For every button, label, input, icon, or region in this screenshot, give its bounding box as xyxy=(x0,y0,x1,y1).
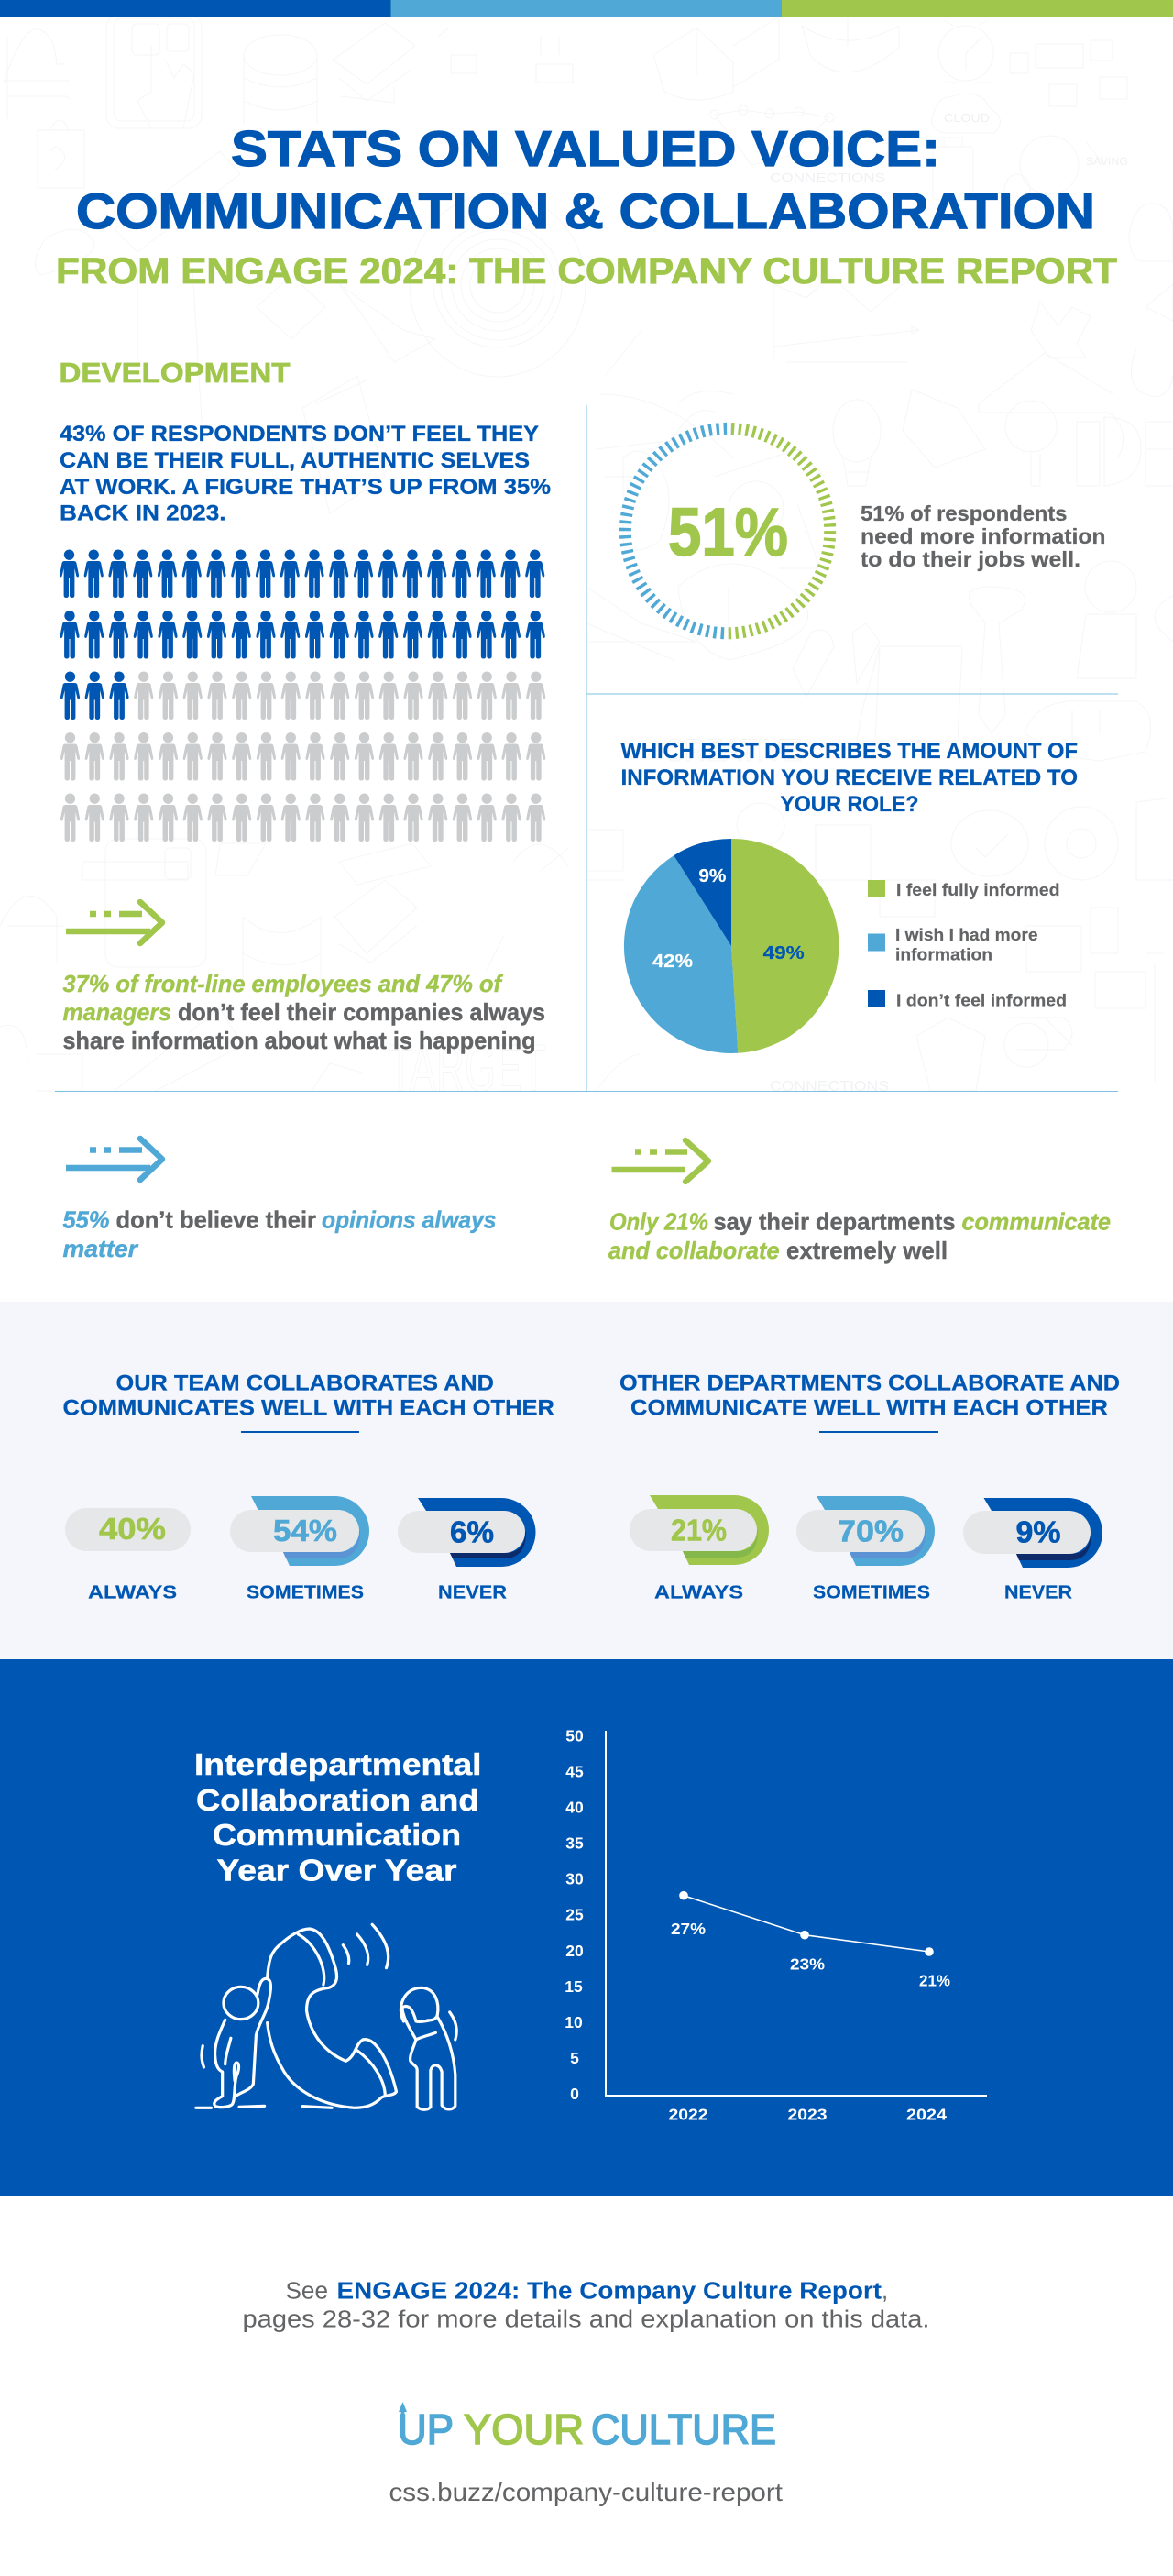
title: STATS ON VALUED VOICE: xyxy=(231,120,940,177)
stat: never 9%: 9% xyxy=(1015,1515,1061,1549)
text: 37% of front-line employees: don’t feel their companies always xyxy=(178,998,545,1026)
panel: information pie chart xyxy=(621,739,1078,1053)
heading: other departments: OTHER DEPARTMENTS COLLABORATE AND xyxy=(619,1371,1120,1395)
question heading: YOUR ROLE? xyxy=(781,792,918,817)
pictogram: 43 of 100 people xyxy=(60,550,545,842)
text: only 21%: communicate xyxy=(962,1208,1111,1236)
heading: other departments xyxy=(619,1371,1120,1433)
icon: blue arrow xyxy=(66,1139,162,1180)
heading: our team: COMMUNICATES WELL WITH EACH OTHER xyxy=(62,1395,554,1421)
text: 37% of front-line employees: managers xyxy=(62,998,171,1026)
line chart: 2023 xyxy=(788,2106,828,2124)
text: 43% of respondents: AT WORK. A FIGURE THAT’S UP FROM 35% xyxy=(60,475,551,500)
line chart: 25 xyxy=(565,1906,584,1924)
line chart xyxy=(565,1726,987,2124)
stat: never 6%: 6% xyxy=(450,1515,494,1549)
text: 43% of respondents: 43% OF RESPONDENTS DON’T FEEL THEY xyxy=(60,422,539,446)
stat: sometimes 70% xyxy=(796,1496,935,1602)
line chart: 0 xyxy=(570,2085,579,2103)
text: 55% opinions: matter xyxy=(62,1235,139,1262)
footer note: pages 28-32 for more details and explanation on this data. xyxy=(242,2306,929,2332)
stat: sometimes 70%: SOMETIMES xyxy=(813,1582,930,1602)
title xyxy=(76,120,1095,239)
heading: Communication xyxy=(213,1818,461,1852)
icon: green arrow xyxy=(66,902,162,943)
line chart: 2024 xyxy=(906,2106,947,2124)
stat: never 9%: NEVER xyxy=(1004,1582,1072,1602)
heading: Collaboration and xyxy=(196,1783,478,1817)
51% description: to do their jobs well. xyxy=(861,547,1080,571)
stat: never 6%: NEVER xyxy=(438,1582,507,1602)
pie chart: 9% xyxy=(698,865,726,886)
text: CREATIVE xyxy=(664,733,802,768)
text: only 21%: Only 21% xyxy=(609,1208,708,1236)
stat: always 40%: ALWAYS xyxy=(88,1582,177,1602)
text: 43% of respondents: CAN BE THEIR FULL, AUTHENTIC SELVES xyxy=(60,448,530,473)
line chart: 27% xyxy=(671,1920,706,1938)
title: COMMUNICATION & COLLABORATION xyxy=(76,182,1095,239)
heading xyxy=(194,1747,482,1888)
subtitle: FROM ENGAGE 2024: THE COMPANY CULTURE REPORT xyxy=(56,251,1117,292)
footer note: See xyxy=(286,2279,328,2305)
text: CONNECTIONS xyxy=(770,1079,889,1095)
logo: up your culture xyxy=(398,2402,776,2453)
line chart: 23% xyxy=(790,1955,825,1974)
heading: other departments: COMMUNICATE WELL WITH EACH OTHER xyxy=(630,1395,1108,1421)
51% description: need more information xyxy=(861,524,1105,548)
stat: always 40%: 40% xyxy=(99,1512,166,1546)
section heading: development: DEVELOPMENT xyxy=(59,358,291,389)
text: 37% of front-line employees: share information about what is happening xyxy=(62,1027,535,1054)
line chart: 40 xyxy=(565,1799,584,1817)
51% description xyxy=(861,501,1105,571)
logo: up your culture: YOUR xyxy=(464,2405,584,2453)
text: 43% of respondents xyxy=(60,422,551,526)
text: 55% opinions: 55% xyxy=(62,1206,110,1234)
stat: sometimes 70%: 70% xyxy=(838,1514,904,1548)
text: TARGET xyxy=(389,1032,546,1106)
pie chart: 49% xyxy=(763,942,805,963)
text: 37% of front-line employees: 37% of front-line employees and 47% of xyxy=(62,970,503,997)
stat: sometimes 54% xyxy=(230,1496,369,1602)
panel dividers xyxy=(55,405,1118,1091)
stat: always 40% xyxy=(65,1508,191,1602)
panel: year over year xyxy=(0,1659,1173,2196)
line chart: 50 xyxy=(565,1726,584,1745)
line chart: 21% xyxy=(919,1972,950,1990)
text: SAVING xyxy=(1086,155,1128,168)
text: 55% opinions xyxy=(62,1206,497,1262)
pie legend: I don’t feel informed xyxy=(896,992,1067,1010)
pie legend xyxy=(868,880,1067,1010)
footer note: , xyxy=(882,2279,888,2305)
text: only 21% xyxy=(608,1208,1111,1264)
footer url: css.buzz/company-culture-report xyxy=(389,2478,783,2506)
line chart: 35 xyxy=(565,1833,584,1852)
panel: collaboration pills xyxy=(0,1302,1173,1659)
stat: always 21%: ALWAYS xyxy=(654,1582,743,1602)
stat: sometimes 54%: 54% xyxy=(273,1514,337,1547)
question heading: WHICH BEST DESCRIBES THE AMOUNT OF xyxy=(621,739,1078,764)
logo: up your culture: CULTURE xyxy=(591,2405,776,2453)
line chart: 45 xyxy=(565,1762,584,1780)
footer note: ENGAGE 2024: The Company Culture Report xyxy=(337,2279,882,2305)
stat: always 21% xyxy=(630,1495,769,1602)
pie chart xyxy=(624,839,839,1053)
line chart: 15 xyxy=(565,1977,583,1996)
pie legend: information xyxy=(895,946,992,964)
text: 37% of front-line employees xyxy=(62,970,545,1054)
51% value: 51% xyxy=(668,494,788,570)
heading: Year Over Year xyxy=(216,1854,457,1888)
icon: green arrow xyxy=(612,1140,708,1182)
heading: our team xyxy=(62,1371,554,1433)
line chart: 2022 xyxy=(669,2106,708,2124)
line chart: 30 xyxy=(565,1870,584,1888)
text: 55% opinions: opinions always xyxy=(322,1206,497,1234)
text: CLOUD xyxy=(944,111,990,125)
icon: people and telephone handset xyxy=(196,1924,456,2109)
text: 43% of respondents: BACK IN 2023. xyxy=(60,501,225,526)
line chart: 20 xyxy=(565,1942,584,1960)
pie legend: I wish I had more xyxy=(895,926,1037,944)
stat: sometimes 54%: SOMETIMES xyxy=(247,1582,364,1602)
top colour bar xyxy=(0,0,1173,17)
pie legend: I feel fully informed xyxy=(896,881,1059,899)
panel: 51% ring stat xyxy=(625,428,1105,633)
stat: never 9% xyxy=(963,1498,1102,1602)
51% description: 51% of respondents xyxy=(861,501,1067,525)
text: CONNECTIONS xyxy=(770,171,885,184)
heading: Interdepartmental xyxy=(194,1747,482,1781)
line chart: 5 xyxy=(570,2049,579,2067)
text: only 21%: and collaborate xyxy=(608,1237,779,1264)
pie chart: 42% xyxy=(652,951,693,972)
question heading: INFORMATION YOU RECEIVE RELATED TO xyxy=(621,765,1078,790)
footer note xyxy=(242,2279,929,2332)
logo: up your culture: UP xyxy=(398,2405,454,2453)
stat: always 21%: 21% xyxy=(671,1514,727,1547)
stat: never 6% xyxy=(398,1498,535,1602)
text: only 21%: extremely well xyxy=(786,1237,948,1264)
text: 55% opinions: don’t believe their xyxy=(115,1206,316,1234)
heading: our team: OUR TEAM COLLABORATES AND xyxy=(115,1371,494,1395)
text: only 21%: say their departments xyxy=(713,1208,955,1236)
ring gauge xyxy=(625,428,830,633)
question heading xyxy=(621,739,1078,817)
line chart: 10 xyxy=(565,2013,583,2031)
